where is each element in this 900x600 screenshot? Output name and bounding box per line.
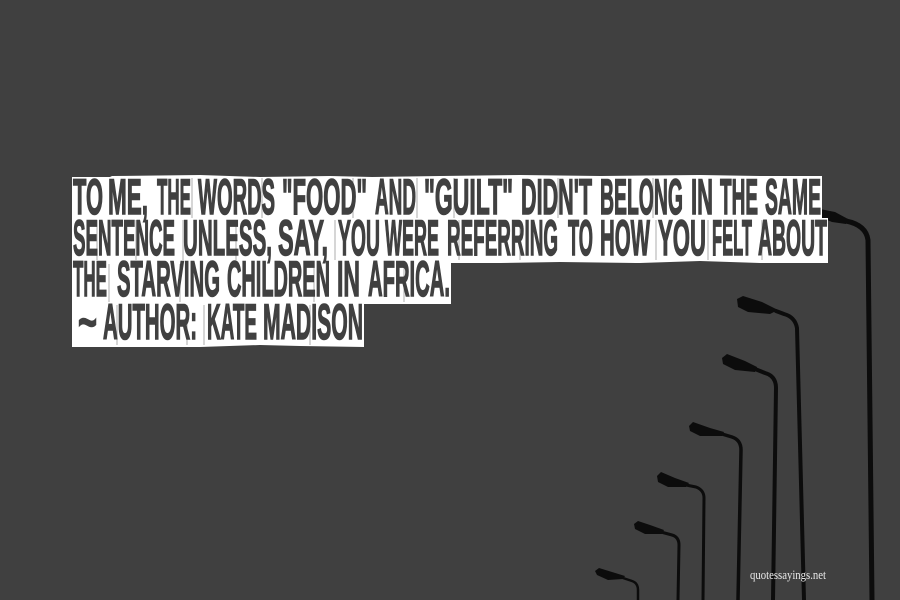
author attribution: KATE bbox=[207, 294, 257, 350]
quote line 2: SENTENCE bbox=[73, 210, 175, 266]
lamp 5 bbox=[657, 472, 704, 600]
quote line 2: YOU bbox=[338, 210, 380, 266]
author attribution: AUTHOR: bbox=[103, 294, 197, 350]
quote line 1 bbox=[73, 169, 821, 225]
street lamps illustration bbox=[595, 209, 872, 600]
quote line 1: "GUILT" bbox=[424, 169, 513, 225]
author attribution: ~ bbox=[78, 294, 97, 350]
quote line 1: THE bbox=[157, 169, 191, 225]
lamp 2 bbox=[737, 296, 804, 600]
quote text: AFRICA. bbox=[368, 251, 450, 307]
quote line 1: DIDN'T bbox=[521, 169, 592, 225]
quote line 1: BELONG bbox=[600, 169, 683, 225]
quote line 1: AND bbox=[375, 169, 416, 225]
paper seams bbox=[97, 178, 762, 345]
quote line 1: TO bbox=[73, 169, 103, 225]
white torn paper strips bbox=[72, 175, 828, 347]
quote line 1: WORDS bbox=[198, 169, 275, 225]
quote line 2: FELT bbox=[712, 210, 752, 266]
lamp 1 bbox=[820, 209, 872, 600]
lamp 6 bbox=[634, 521, 679, 600]
quote line 2: HOW bbox=[600, 210, 650, 266]
quote line 3: STARVING bbox=[117, 251, 220, 307]
quote line 1: "FOOD" bbox=[282, 169, 367, 225]
quote line 2: SAY, bbox=[278, 210, 328, 266]
quote line 2: WERE bbox=[385, 210, 439, 266]
quote line 2 bbox=[73, 210, 827, 266]
quote line 2: UNLESS, bbox=[183, 210, 272, 266]
quote line 1: ME, bbox=[108, 169, 148, 225]
quote line 3: THE bbox=[73, 251, 107, 307]
quote line 2: YOU bbox=[658, 210, 706, 266]
lamp 7 bbox=[595, 568, 638, 600]
watermark: quotessayings.net bbox=[750, 567, 826, 582]
quote line 1: THE bbox=[720, 169, 758, 225]
quote text bbox=[73, 169, 827, 350]
quote line 2: REFERRING bbox=[447, 210, 558, 266]
quote text: MADISON bbox=[263, 294, 363, 350]
quote line 1: IN bbox=[691, 169, 713, 225]
lamp 3 bbox=[722, 354, 776, 600]
quote line 3: IN bbox=[337, 251, 360, 307]
quote line 3 bbox=[73, 251, 450, 307]
lamp 4 bbox=[689, 422, 741, 600]
quote line 3: CHILDREN bbox=[227, 251, 330, 307]
quote line 2: TO bbox=[568, 210, 593, 266]
